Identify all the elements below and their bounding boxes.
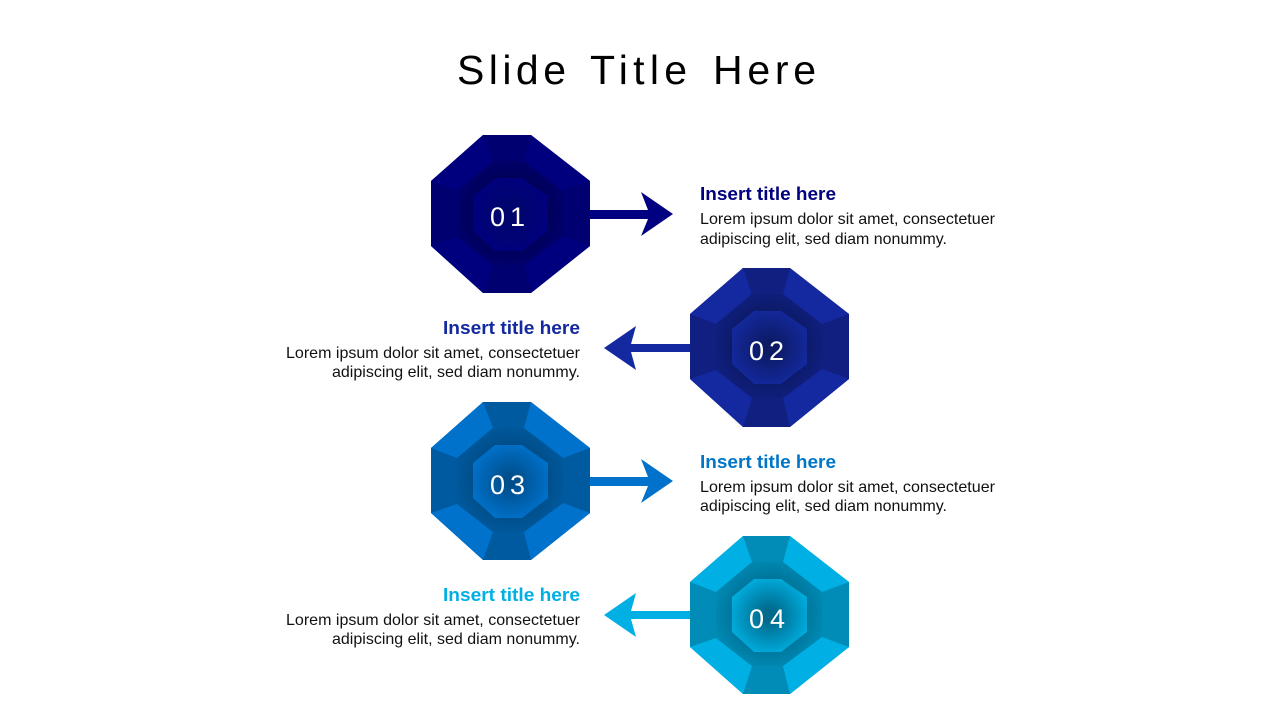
body 02: adipiscing elit, sed diam nonummy.: [332, 364, 580, 381]
text block 04: [286, 585, 581, 648]
number 01: 01: [490, 202, 525, 232]
text block 03: [700, 452, 996, 515]
number 04: 04: [749, 604, 785, 634]
step 04 octagon: [690, 536, 849, 694]
step 02 octagon: [690, 268, 849, 427]
arrow 02: [604, 326, 690, 370]
body 04: adipiscing elit, sed diam nonummy.: [332, 631, 580, 648]
step 01 octagon: [431, 135, 590, 293]
body 03: Lorem ipsum dolor sit amet, consectetuer: [700, 479, 996, 496]
title: Here: [713, 47, 816, 93]
body 01: Lorem ipsum dolor sit amet, consectetuer: [700, 211, 996, 228]
body 02: Lorem ipsum dolor sit amet, consectetuer: [286, 345, 581, 362]
text block 01: [700, 184, 996, 248]
heading 01: Insert title here: [700, 184, 836, 204]
title: Title: [590, 47, 687, 93]
arrow 03: [590, 459, 673, 503]
text block 02: [286, 318, 581, 381]
heading 03: Insert title here: [700, 452, 836, 472]
title: Slide: [457, 47, 566, 93]
body 04: Lorem ipsum dolor sit amet, consectetuer: [286, 612, 581, 629]
heading 02: Insert title here: [443, 318, 580, 338]
body 03: adipiscing elit, sed diam nonummy.: [700, 498, 947, 515]
body 01: adipiscing elit, sed diam nonummy.: [700, 231, 947, 248]
arrow 01: [590, 192, 673, 236]
step 03 octagon: [431, 402, 590, 560]
number 02: 02: [749, 336, 784, 366]
arrow 04: [604, 593, 690, 637]
number 03: 03: [490, 470, 525, 500]
heading 04: Insert title here: [443, 585, 580, 605]
